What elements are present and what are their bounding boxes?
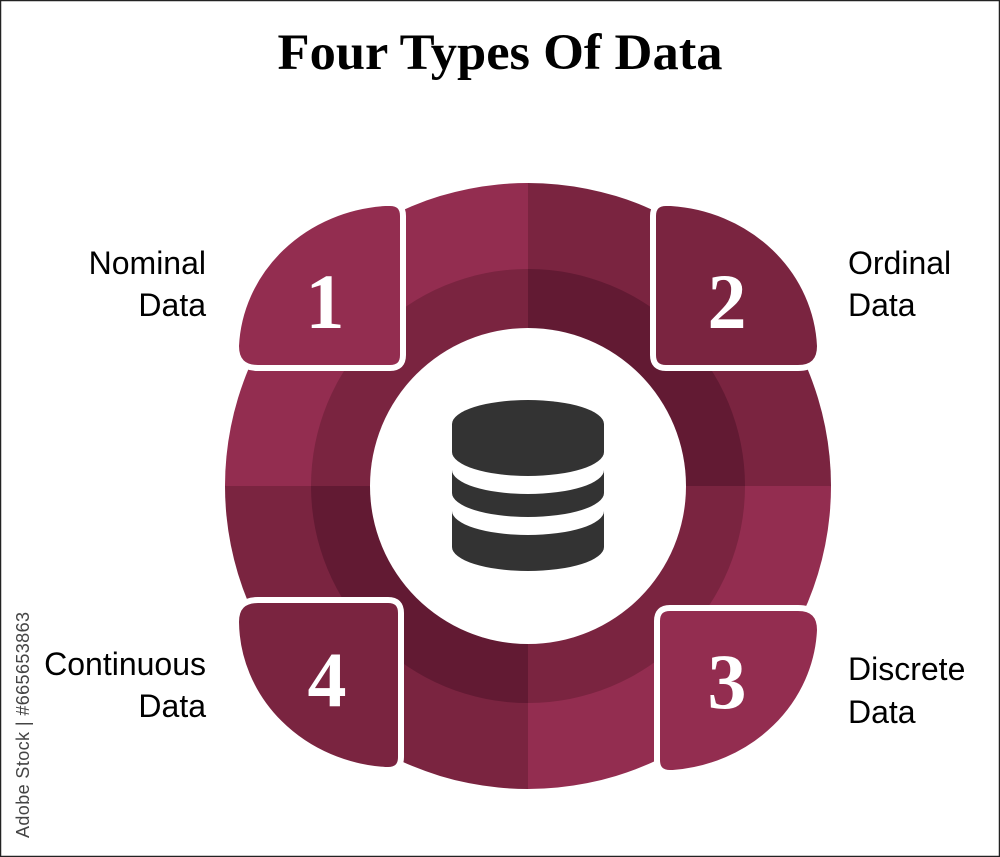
box 1 [236,203,403,368]
label: discrete data: Discrete [848,651,965,687]
label: continuous data: Continuous [44,646,206,682]
box 2: 2 [708,258,746,345]
watermark: Adobe Stock | #665653863 [13,612,33,838]
label: ordinal data: Data [848,287,916,323]
title: Four Types Of Data [278,25,722,81]
icon: database [452,400,604,571]
label: continuous data: Data [138,688,206,724]
label: nominal data: Nominal [89,245,206,281]
box 4: 4 [308,636,346,723]
box 3: 3 [708,638,746,725]
box 4 [236,600,401,770]
label: discrete data: Data [848,694,916,730]
label: ordinal data: Ordinal [848,245,951,281]
label: nominal data: Data [138,287,206,323]
ring diagram [225,183,831,789]
box 2 [653,203,820,368]
box 3 [657,608,820,773]
box 1: 1 [306,258,344,345]
